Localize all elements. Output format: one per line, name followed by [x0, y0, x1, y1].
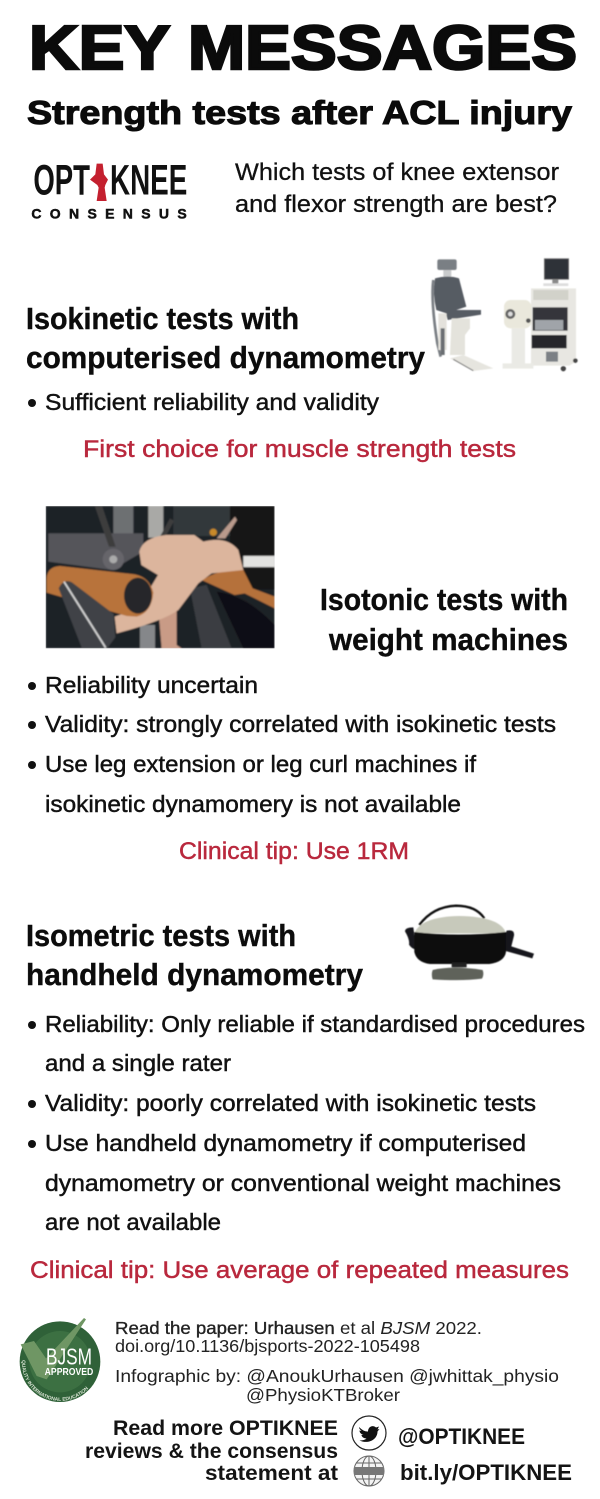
bullet list: isometric — [28, 1011, 585, 1235]
heading: isokinetic: Isokinetic tests with — [26, 301, 299, 336]
credits: Infographic by: @AnoukUrhausen @jwhittak_physio — [115, 1366, 559, 1387]
badge: BJSM approved — [20, 1318, 100, 1402]
clinical tip: Clinical tip: Use 1RM — [179, 838, 409, 865]
heading: isometric: handheld dynamometry — [26, 957, 364, 992]
bullet list: isotonic: Validity: strongly correlated with isokinetic tests — [45, 711, 556, 737]
bullet list: isotonic: Use leg extension or leg curl machines if — [45, 751, 477, 777]
read more: statement at — [205, 1462, 338, 1485]
read more: Read more OPTIKNEE — [113, 1417, 338, 1440]
heading: isometric — [26, 918, 364, 992]
bullet: Sufficient reliability and validity — [45, 389, 380, 415]
website: bit.ly/OPTIKNEE — [400, 1460, 572, 1485]
heading: isometric: Isometric tests with — [26, 918, 296, 953]
subtitle: Strength tests after ACL injury — [27, 94, 573, 131]
heading: isotonic: weight machines — [328, 622, 568, 657]
heading: isokinetic: computerised dynamometry — [26, 340, 426, 375]
icon: knee joint — [90, 164, 108, 201]
read more — [85, 1417, 338, 1485]
icon: twitter — [352, 1416, 386, 1450]
panel: isotonic tests — [28, 506, 568, 865]
heading: isokinetic — [26, 301, 426, 375]
question: and flexor strength are best? — [235, 191, 557, 218]
icon: globe — [354, 1456, 384, 1486]
image: leg curl machine photo — [46, 506, 275, 648]
heading: isotonic: Isotonic tests with — [320, 582, 568, 617]
citation: doi.org/10.1136/bjsports-2022-105498 — [115, 1336, 420, 1356]
recommendation: First choice for muscle strength tests — [83, 436, 516, 463]
panel: isometric tests — [26, 906, 585, 1284]
image: isokinetic dynamometer — [433, 259, 578, 371]
credits: @PhysioKTBroker — [246, 1385, 400, 1405]
bullet list: isometric: Reliability: Only reliable if standardised procedures — [45, 1011, 585, 1037]
panel: isokinetic tests — [26, 259, 578, 463]
heading: isotonic — [320, 582, 568, 657]
badge: BJSM approved: BJSM — [46, 1343, 92, 1369]
logo: Optiknee consensus: KNEE — [110, 157, 187, 205]
citation: Read the paper: Urhausen et al BJSM 2022. — [115, 1318, 482, 1338]
clinical tip: Clinical tip: Use average of repeated measures — [30, 1257, 569, 1284]
logo: Optiknee consensus: CONSENSUS — [31, 205, 187, 221]
badge: BJSM approved: QUALITY INTERNATIONAL EDUCATION — [20, 1360, 88, 1401]
read more: reviews & the consensus — [85, 1440, 338, 1463]
question — [235, 159, 559, 218]
bullet list: isometric: are not available — [45, 1209, 221, 1235]
bullet list: isotonic: isokinetic dynamomery is not available — [45, 791, 461, 817]
title: KEY MESSAGES — [29, 14, 577, 83]
logo: Optiknee consensus: OPT — [33, 157, 90, 205]
question: Which tests of knee extensor — [235, 159, 559, 186]
bullet list: isometric: dynamometry or conventional weight machines — [45, 1170, 561, 1196]
logo: Optiknee consensus — [31, 157, 187, 221]
bullet list: isotonic: Reliability uncertain — [45, 672, 258, 698]
citation — [115, 1318, 482, 1356]
bullet list: isotonic — [28, 672, 556, 817]
bullet list: isometric: and a single rater — [45, 1050, 231, 1076]
badge: BJSM approved: APPROVED — [45, 1367, 94, 1378]
bullet list: isometric: Use handheld dynamometry if computerised — [45, 1130, 526, 1156]
credits — [115, 1366, 559, 1405]
image: handheld dynamometer — [405, 906, 534, 980]
twitter handle: @OPTIKNEE — [398, 1424, 525, 1449]
bullet list: isometric: Validity: poorly correlated with isokinetic tests — [45, 1090, 536, 1116]
